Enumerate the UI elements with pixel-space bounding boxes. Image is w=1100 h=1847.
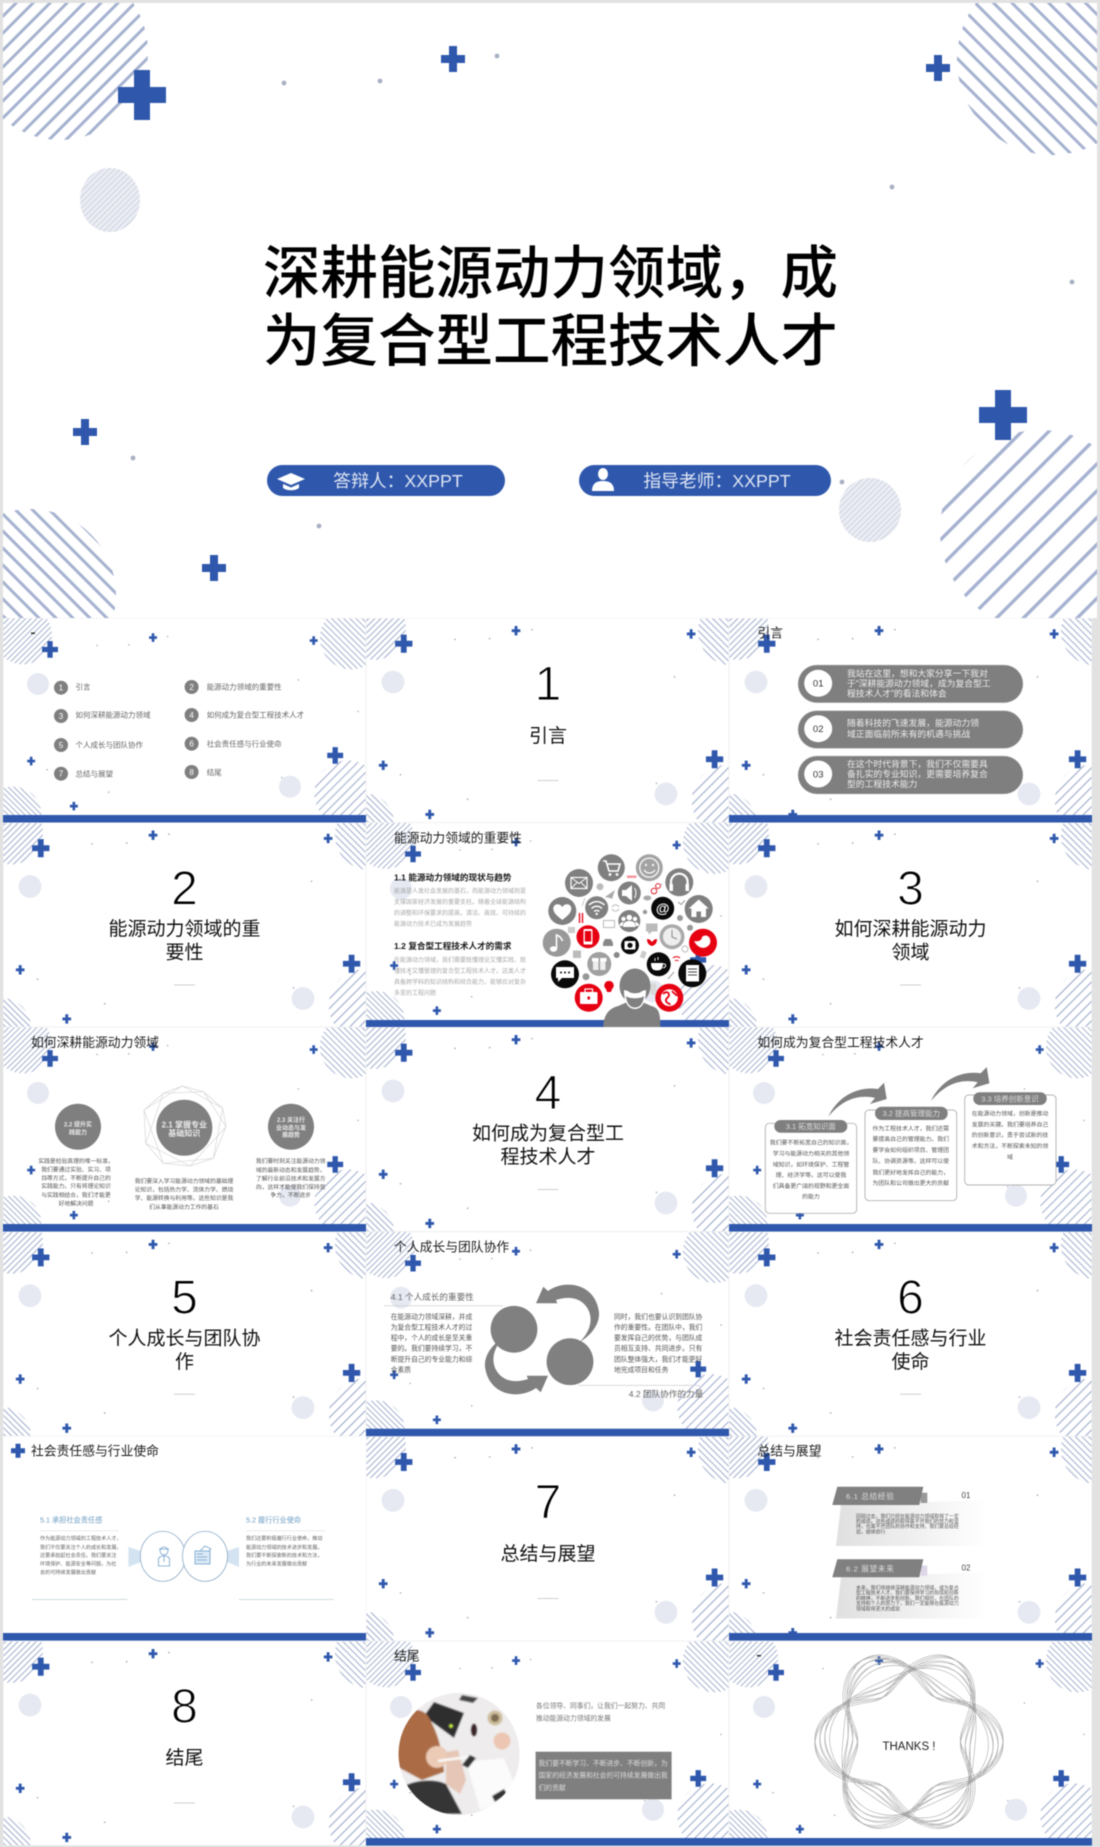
presenter pill	[267, 465, 505, 496]
card 3.1: 我们要不断拓宽自己的知识面，	[770, 1138, 852, 1146]
contents list: 5	[59, 741, 64, 750]
subsection 1.1: 的调整和环保要求的提高，清洁、高效、可持续的	[394, 909, 526, 917]
panel: section 7: 总结与展望	[500, 1543, 596, 1565]
contents list: 结尾	[207, 767, 222, 777]
panel: section 5: 个人成长与团队协	[108, 1328, 261, 1350]
contents list: 如何深耕能源动力领域	[76, 710, 151, 720]
contents list: 4	[189, 711, 194, 720]
pill 03: 备扎实的专业知识，更需要培养复合	[847, 768, 988, 779]
panel: section 3: 领域	[891, 942, 930, 964]
card 3.1: 们具备更广阔的视野和更全面	[773, 1182, 849, 1190]
panel: social responsibility slide	[3, 1436, 366, 1641]
subsection 1.1: 能源动力技术已成为发展趋势	[394, 920, 472, 928]
heading: 如何深耕能源动力领域	[31, 1035, 159, 1050]
subsection 1.2: 懂技术又懂管理的复合型工程技术人才。这类人才	[394, 967, 526, 975]
block 6.1: 回顾过去，我们已经在能源动力领域取得了一定	[856, 1513, 959, 1520]
circle 2.3: 展趋势	[282, 1131, 300, 1139]
column 5.2: 我们要不断探索新的技术和方法，	[246, 1552, 322, 1559]
subsection 1.1: 1.1 能源动力领域的现状与趋势	[394, 871, 512, 882]
text block left: 实践是检验真理的唯一标准，	[38, 1157, 114, 1165]
pill 01: 01	[813, 679, 823, 690]
text block right: 团队整体强大，我们才能更好	[614, 1354, 703, 1363]
subsection 1.1: 支撑国家经济发展的重要支柱。随着全球能源结构	[394, 898, 526, 906]
arrow: card 1 to card 2	[828, 1083, 887, 1117]
circle 2.2	[55, 1104, 101, 1150]
icon: worker	[158, 1547, 170, 1566]
pill 03: 03	[813, 769, 823, 780]
pill 01: 我站在这里，想和大家分享一下我对	[847, 668, 988, 678]
card 3.1: 学习与能源动力相关的其他领	[773, 1149, 849, 1157]
card 3.1	[765, 1120, 857, 1213]
contents list: 总结与展望	[76, 768, 113, 778]
card 3.2: 为团队和公司做出更大的贡献	[873, 1179, 949, 1187]
text block left: 与实践相结合，我们才能更	[41, 1191, 111, 1199]
contents list: 6	[189, 740, 194, 749]
contents list: 3	[59, 712, 64, 721]
icon: music note	[543, 929, 571, 957]
icon: notebook	[678, 959, 706, 987]
cycle arrows and circles	[485, 1285, 599, 1394]
panel: section 3	[695, 801, 1100, 1060]
icon: cart	[598, 854, 625, 881]
gray text box: 们的贡献	[538, 1783, 566, 1792]
thanks text: THANKS !	[882, 1741, 936, 1753]
panel: section 6: 使命	[891, 1351, 930, 1373]
subsection 1.1: 能源是人类社会发展的基石，而能源动力领域则是	[394, 887, 526, 895]
text block right: 争力，不断进步	[270, 1191, 311, 1199]
text block right: 同时，我们也要认识到团队协	[614, 1312, 703, 1321]
block 6.1: 的成绩。这些成绩的取得离不开我们的努力和坚	[856, 1518, 959, 1525]
text block right: 地完成项目和任务	[614, 1365, 669, 1374]
panel: section 5: 作	[175, 1351, 194, 1373]
column 5.1: 我们不仅要关注个人的成长和发展，	[40, 1544, 122, 1551]
block 6.1: 01	[962, 1491, 971, 1500]
icon: plus	[11, 1444, 25, 1458]
text block left: 在能源动力领域深耕，并成	[391, 1312, 472, 1321]
text block right: 要发挥自己的优势，与团队成	[614, 1333, 703, 1342]
photo: woman at desk	[395, 1690, 523, 1818]
contents list: 社会责任感与行业使命	[207, 738, 282, 748]
panel: section 2: 能源动力领域的重	[108, 918, 261, 940]
text block left: 要的。我们要持续学习，不	[391, 1344, 472, 1353]
panel: section 6: 社会责任感与行业	[834, 1328, 987, 1350]
contents list: 引言	[76, 682, 91, 692]
card 3.2: 我们更好地发挥自己的能力，	[873, 1168, 949, 1176]
spirograph ring	[753, 1563, 1096, 1847]
heading: 能源动力领域的重要性	[394, 830, 522, 845]
text block right: 向，这样才能使我们保持竞	[256, 1183, 326, 1191]
icon: person with headset	[603, 968, 660, 1028]
circle 2.3: 业动态与发	[276, 1124, 306, 1132]
text block right: 了解行业前沿技术和发展方	[256, 1174, 326, 1182]
presenter pill: 答辩人：XXPPT	[333, 471, 463, 491]
card 3.2: 要学会如何组织项目、管理团	[873, 1146, 949, 1154]
card 3.3: 术和方法，不断探索未知的领	[972, 1142, 1048, 1150]
panel: section 1: 1	[535, 658, 561, 711]
card 3.3: 3.3 培养创新意识	[981, 1093, 1039, 1103]
block 6.2: 型工程技术人才。我们要保持学习的热情和创新	[856, 1590, 959, 1596]
card 3.1: 理、经济学等。这可以使我	[776, 1171, 846, 1179]
contents list: 2	[189, 683, 194, 692]
text block left: 我们要通过实验、实习、项	[41, 1165, 111, 1173]
card 3.3: 域	[1007, 1153, 1013, 1161]
panel: section 2: 2	[171, 862, 198, 916]
panel: section 2	[0, 801, 404, 1060]
twin circles with icons	[128, 1531, 239, 1581]
panel: section 7	[332, 1415, 767, 1674]
heading: 如何成为复合型工程技术人才	[757, 1035, 924, 1050]
small scattered icons: www	[627, 874, 637, 879]
card 3.3: 在能源动力领域，创新是推动	[972, 1109, 1048, 1117]
card 3.2: 3.2 提高管理能力	[883, 1108, 940, 1118]
contents list: 8	[189, 768, 194, 777]
contents list	[54, 680, 305, 781]
advisor pill	[579, 465, 831, 496]
subsection 1.2: 具备跨学科的知识结构和综合能力，能够应对复杂	[394, 978, 526, 986]
panel: section 1	[332, 596, 767, 855]
card 3.1: 的能力	[802, 1193, 820, 1201]
panel: compound talent slide	[710, 1015, 1100, 1253]
icon: person	[592, 468, 614, 491]
contents list: 能源动力领域的重要性	[207, 681, 282, 691]
icon: people	[618, 910, 640, 932]
icon: camera	[621, 936, 639, 954]
card 3.3	[965, 1092, 1056, 1185]
text block left: 实践能力。只有将理论知识	[41, 1182, 111, 1190]
icon: clock	[660, 924, 684, 949]
panel: section 8	[0, 1619, 404, 1847]
heading: 个人成长与团队协作	[394, 1239, 509, 1254]
column 5.1: 环境保护、能源安全等问题，为社	[40, 1561, 116, 1568]
block 6.2: 02	[962, 1564, 971, 1573]
icon: graduation cap	[277, 473, 305, 490]
panel: how to deepen slide	[0, 1015, 383, 1253]
panel: section 6	[695, 1210, 1100, 1469]
pill 02	[798, 711, 1023, 748]
label 4.2: 4.2 团队协作的力量	[629, 1388, 704, 1399]
panel: section 5: 5	[171, 1272, 198, 1325]
label 4.2	[578, 1385, 704, 1399]
icon: gift	[587, 952, 611, 976]
arrow: card 2 to card 3	[931, 1067, 989, 1101]
column 5.2	[239, 1516, 334, 1600]
icon: heart	[548, 897, 576, 925]
circle 2.2: 践能力	[69, 1128, 87, 1136]
column 5.2: 我们还要积极履行行业使命，推动	[246, 1535, 322, 1542]
pill 01: 于“深耕能源动力领域，成为复合型工	[847, 678, 991, 688]
card 3.2: 作为工程技术人才，我们还需	[873, 1124, 949, 1132]
icon: house	[685, 895, 713, 923]
text block right: 我们要时刻关注能源动力领	[256, 1157, 326, 1165]
column 5.1	[32, 1516, 127, 1600]
subsection 1.2	[394, 940, 526, 997]
panel: section 1: 引言	[529, 725, 567, 747]
wire polygon	[144, 1086, 226, 1166]
pill 02: 域正面临前所未有的机遇与挑战	[847, 728, 970, 739]
card 3.1: 域知识，如环境保护、工程管	[773, 1160, 849, 1168]
panel: section 3: 如何深耕能源动力	[834, 918, 987, 940]
card 3.2: 要提高自己的管理能力。我们	[873, 1135, 949, 1143]
text block right: 员相互支持、共同进步。只有	[614, 1344, 703, 1353]
card 3.3: 发展的关键。我们要培养自己	[972, 1120, 1048, 1128]
panel: section 2: 要性	[165, 942, 204, 964]
block 6.1	[832, 1487, 987, 1546]
subsection 1.2: 1.2 复合型工程技术人才的需求	[394, 940, 512, 951]
icon cluster	[543, 854, 717, 1028]
text block centre: 论知识，包括热力学、流体力学、燃烧	[135, 1185, 233, 1193]
panel: section 3: 3	[897, 862, 924, 916]
icon: chat	[551, 960, 579, 988]
contents list: 个人成长与团队协作	[76, 739, 143, 749]
icon: bird	[689, 929, 717, 957]
text block centre: 我们要深入学习能源动力领域的基础理	[135, 1177, 233, 1185]
panel: section 8: 结尾	[165, 1747, 204, 1769]
pill 01: 程技术人才”的看法和体会	[847, 688, 947, 698]
panel: summary and outlook slide	[695, 1415, 1100, 1674]
gray text box: 国家的经济发展和社会的可持续发展做出我	[538, 1771, 668, 1780]
subsection 1.1	[394, 871, 526, 928]
circle 2.3: 2.3 关注行	[277, 1116, 305, 1124]
panel: growth and teamwork slide	[347, 1220, 746, 1457]
icon: speaker	[618, 882, 641, 904]
contents list: 7	[59, 770, 64, 779]
icon: suitcase	[575, 984, 603, 1012]
gray text box	[536, 1752, 672, 1799]
block 6.2: 6.2 展望未来	[846, 1563, 894, 1573]
contents dash	[31, 632, 35, 634]
heading: 社会责任感与行业使命	[31, 1443, 159, 1458]
small scattered icons	[568, 874, 693, 995]
text block left: 目等方式，不断提升自己的	[41, 1174, 111, 1182]
cover title: 深耕能源动力领域，成	[263, 242, 838, 306]
panel: table of contents slide	[0, 606, 383, 844]
text block left: 为复合型工程技术人才的过	[391, 1322, 472, 1331]
icon: headphones	[665, 868, 693, 896]
block 6.2: 支持和个人的努力下，我们一定能够在能源动力	[856, 1600, 959, 1607]
column 5.2: 5.2 履行行业使命	[246, 1516, 301, 1524]
panel: section 7: 7	[535, 1476, 561, 1529]
text block left: 断提升自己的专业能力和综	[391, 1354, 472, 1363]
closing text: 推动能源动力领域的发展	[536, 1714, 611, 1723]
icon: wifi	[585, 896, 608, 919]
text block centre: 们从事能源动力工作的基石	[149, 1203, 219, 1211]
icon: phone	[576, 925, 600, 948]
block 6.1: 持，也离不开团队的协作和支持。我们要总结经	[856, 1523, 959, 1530]
block 6.1: 6.1 总结经验	[846, 1491, 894, 1501]
circle 2.1: 2.1 掌握专业	[162, 1119, 207, 1129]
card 3.2	[865, 1107, 957, 1201]
panel: section 8: 8	[171, 1681, 198, 1734]
heading: 总结与展望	[757, 1443, 822, 1458]
card 3.2: 队、协调资源等。这样可以使	[873, 1157, 949, 1165]
panel: section 5	[0, 1210, 404, 1469]
panel: cover slide	[0, 0, 1100, 681]
subsection 1.2: 多变的工程问题	[394, 989, 436, 997]
column 5.1: 5.1 承担社会责任感	[40, 1516, 102, 1524]
icon: at sign	[651, 897, 674, 920]
column 5.2: 能源动力领域的技术进步和发展。	[246, 1544, 322, 1551]
block 6.2	[832, 1559, 987, 1618]
circle 2.3	[268, 1104, 314, 1150]
panel: section 4	[332, 1005, 767, 1264]
subsection 1.2: 在能源动力领域，我们需要既懂理论又懂实践、既	[394, 956, 526, 964]
block 6.2: 领域取得更大的成就	[856, 1606, 900, 1613]
column 5.1: 还要承担起社会责任。我们要关注	[40, 1552, 116, 1559]
block 6.2: 的精神，不断进步和创新。我们相信，在团队的	[856, 1595, 959, 1602]
text block left: 合素质	[391, 1365, 411, 1374]
gray text box: 我们要不断学习、不断进步、不断创新，为	[538, 1759, 668, 1768]
label 4.1	[384, 1291, 503, 1306]
card 3.3: 的创新意识，勇于尝试新的技	[972, 1131, 1048, 1139]
panel: importance of energy slide	[347, 811, 746, 1048]
pill 01	[798, 665, 1023, 703]
panel: section 4: 如何成为复合型工	[472, 1122, 624, 1144]
circle 2.1	[156, 1100, 212, 1156]
advisor pill: 指导老师：XXPPT	[643, 471, 791, 491]
heading: 引言	[757, 625, 783, 640]
icon: globe	[655, 984, 683, 1012]
contents list: 1	[59, 684, 64, 693]
text block left: 好地解决问题	[59, 1199, 94, 1207]
circle 2.1: 基础知识	[168, 1128, 200, 1138]
text block left: 程中，个人的成长是至关重	[391, 1333, 472, 1342]
column 5.1: 会的可持续发展做出贡献	[40, 1569, 96, 1576]
circle 2.2: 2.2 提升实	[64, 1120, 92, 1128]
icon: at sign: @	[656, 900, 670, 916]
card 3.1: 3.1 拓宽知识面	[786, 1121, 836, 1131]
dash	[757, 1655, 761, 1656]
column 5.1: 作为能源动力领域的工程技术人才，	[40, 1535, 122, 1542]
closing text: 各位领导、同事们，让我们一起努力、共同	[536, 1701, 665, 1710]
panel: introduction slide	[695, 596, 1100, 855]
icon: coffee cup	[647, 952, 671, 976]
icon: smile	[636, 854, 663, 881]
panel: section 6: 6	[897, 1272, 924, 1325]
icon: envelope	[565, 869, 593, 897]
pill 02: 02	[813, 724, 823, 735]
panel: closing slide	[365, 1641, 730, 1846]
icon: document	[195, 1546, 211, 1564]
pill 03	[798, 756, 1023, 794]
text block right: 域的最新动态和发展趋势，	[256, 1166, 325, 1174]
panel: section 4: 程技术人才	[500, 1146, 596, 1168]
heading: 结尾	[394, 1648, 420, 1663]
text block right: 作的重要性。在团队中，我们	[614, 1322, 703, 1331]
block 6.2: 未来，我们将继续深耕能源动力领域，成为复合	[856, 1584, 959, 1592]
column 5.2: 为行业的未来发展做出贡献	[246, 1561, 307, 1568]
contents list: 如何成为复合型工程技术人才	[207, 710, 305, 720]
panel: thanks slide	[710, 1563, 1100, 1847]
pill 03: 型的工程技术能力	[847, 778, 917, 789]
text block centre: 学、能源转换与利用等。这些知识是我	[135, 1194, 233, 1202]
pill 02: 随着科技的飞速发展，能源动力领	[847, 717, 979, 728]
label 4.1: 4.1 个人成长的重要性	[391, 1291, 474, 1302]
pill 03: 在这个时代背景下，我们不仅需要具	[847, 758, 988, 769]
panel: section 4: 4	[535, 1067, 561, 1120]
block 6.1: 验，继续前行	[856, 1528, 885, 1536]
cover title: 为复合型工程技术人才	[263, 310, 838, 374]
